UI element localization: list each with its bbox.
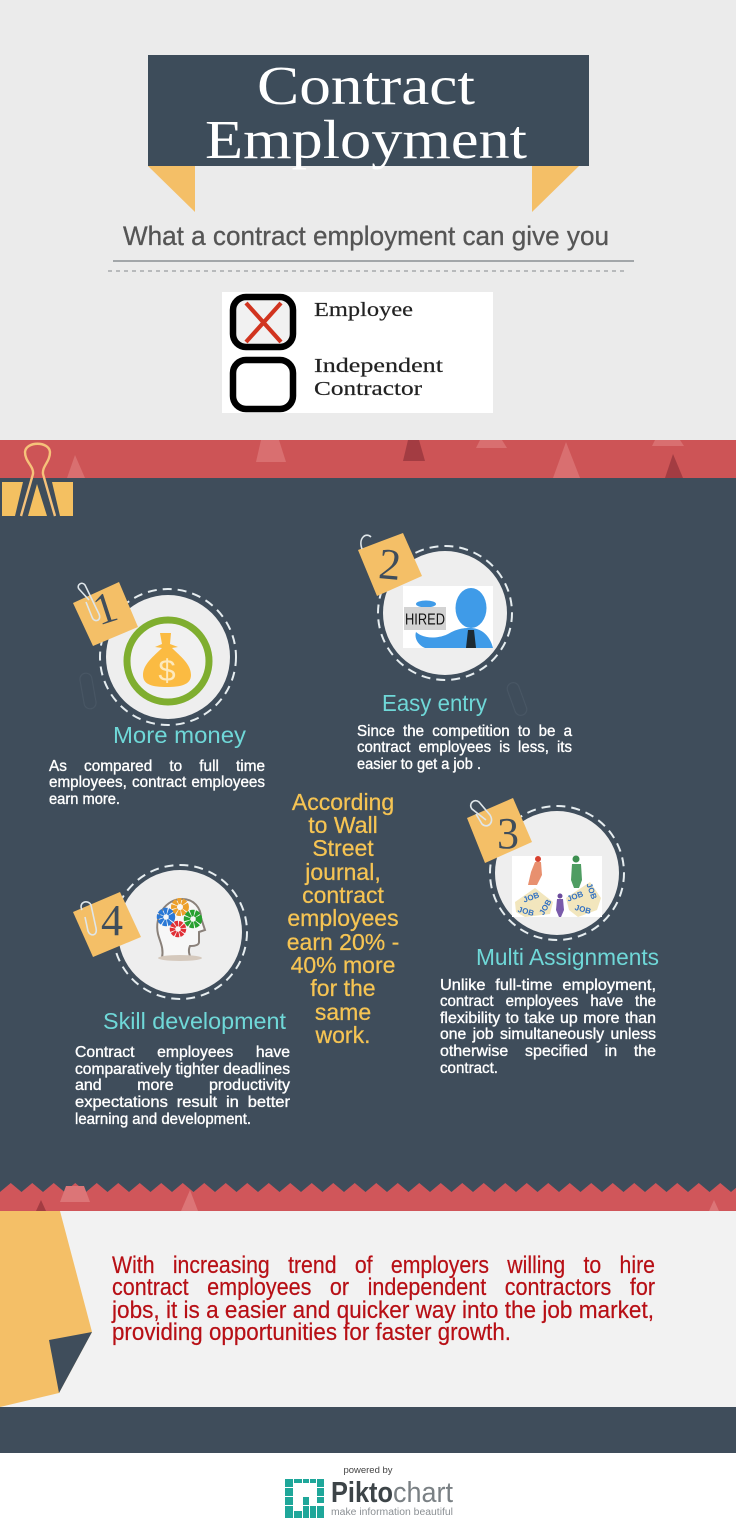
heading: Skill development: [103, 1008, 287, 1034]
icon: folded yellow corner: [0, 1211, 92, 1407]
callout: wall street journal: [287, 789, 399, 1048]
body text: [440, 977, 656, 1077]
dark footer strip: [0, 1407, 736, 1453]
conclusion text: providing opportunities for faster growth.: [112, 1319, 511, 1346]
heading: Easy entry: [382, 690, 487, 716]
conclusion text: With increasing trend of employers willing to hire: [112, 1252, 655, 1279]
icon: hired figure circle: HIRED: [405, 612, 445, 628]
body text: Since the competition to be a: [357, 723, 572, 740]
panel: conclusion: [0, 1211, 736, 1407]
body text: flexibility to take up more than: [440, 1010, 656, 1027]
title banner: [148, 55, 589, 212]
icon: job dice circle: [490, 806, 624, 940]
icon: money bag circle: [100, 589, 236, 725]
piktochart wordmark: Pikto: [331, 1477, 393, 1509]
conclusion text: [111, 1252, 655, 1346]
badge: number 1: [73, 582, 138, 646]
label: independent contractor: [314, 355, 444, 400]
subtitle: What a contract employment can give you: [123, 221, 609, 251]
icon: piktochart logo: [285, 1479, 324, 1518]
panel: item 2 easy entry: [357, 533, 572, 773]
callout: wall street journal: employees: [287, 905, 399, 931]
panel: item 3 multi assignments: [440, 798, 659, 1077]
body text: one job simultaneously unless: [440, 1026, 656, 1043]
label: employee: Employee: [314, 299, 413, 321]
icon: job dice circle: JOB: [584, 882, 599, 901]
icon: head with gears circle: [113, 865, 247, 999]
callout: wall street journal: work.: [315, 1022, 370, 1048]
callout: wall street journal: contract: [302, 882, 385, 908]
body text: expectations result in better: [75, 1094, 290, 1111]
callout: wall street journal: same: [315, 999, 371, 1025]
panel: zigzag red band: [0, 1183, 736, 1211]
body text: [75, 1044, 290, 1128]
title banner: Contract: [257, 55, 475, 116]
powered by: powered by: [343, 1465, 393, 1476]
body text: otherwise specified in the: [440, 1043, 656, 1060]
panel: item 1 more money: [49, 582, 265, 808]
badge: number 3: [467, 798, 532, 863]
heading: More money: [113, 722, 247, 748]
icon: job dice circle: JOB: [574, 903, 592, 916]
ghost paperclip: [79, 672, 97, 710]
panel: main dark section: [0, 478, 736, 1192]
panel: red band: [0, 440, 736, 478]
icon: checked box: [233, 297, 293, 347]
callout: wall street journal: 40% more: [291, 952, 395, 978]
conclusion text: contract employees or independent contractors for: [112, 1274, 655, 1301]
body text: contract employees have the: [440, 993, 656, 1010]
label: independent contractor: Contractor: [314, 378, 422, 400]
panel: header background: [0, 0, 736, 440]
callout: wall street journal: journal,: [304, 859, 381, 885]
callout: wall street journal: earn 20% -: [287, 929, 399, 955]
body text: Unlike full-time employment,: [440, 977, 656, 994]
icon: money bag circle: $: [158, 653, 176, 688]
body text: easier to get a job .: [357, 756, 481, 773]
body text: [357, 723, 572, 773]
tagline: make information beautiful: [331, 1507, 453, 1518]
icon: empty box: [233, 360, 293, 409]
panel: item 4 skill development: [73, 865, 290, 1128]
conclusion text: jobs, it is a easier and quicker way into the job market,: [111, 1297, 654, 1324]
icon: hired figure circle: [378, 546, 512, 680]
callout: wall street journal: According: [292, 789, 394, 815]
icon: job dice circle: JOB: [522, 890, 541, 905]
badge: number 2: [358, 533, 422, 596]
piktochart wordmark: chart: [393, 1477, 453, 1509]
icon: job dice circle: JOB: [517, 905, 535, 918]
ghost paperclip: [506, 681, 528, 717]
heading: Multi Assignments: [476, 944, 659, 970]
badge: number 3: 3: [497, 809, 519, 858]
piktochart wordmark: [331, 1477, 453, 1509]
body text: comparatively tighter deadlines: [75, 1061, 290, 1078]
body text: As compared to full time: [49, 758, 265, 775]
body text: learning and development.: [75, 1111, 251, 1128]
body text: contract.: [440, 1060, 498, 1077]
checkbox legend: [222, 292, 493, 413]
body text: earn more.: [49, 791, 120, 808]
panel: piktochart footer: [0, 1453, 736, 1528]
body text: and more productivity: [75, 1077, 290, 1094]
body text: [49, 758, 265, 808]
badge: number 2: 2: [377, 539, 403, 590]
callout: wall street journal: to Wall: [308, 812, 378, 838]
badge: number 4: 4: [101, 896, 123, 945]
icon: job dice circle: JOB: [566, 889, 585, 904]
badge: number 1: 1: [87, 582, 123, 635]
body text: contract employees is less, its: [357, 739, 572, 756]
label: independent contractor: Independent: [314, 355, 444, 377]
icon: binder clip: [2, 444, 73, 516]
callout: wall street journal: for the: [310, 975, 376, 1001]
body text: employees, contract employees: [49, 774, 265, 791]
icon: job dice circle: JOB: [537, 898, 554, 917]
title banner: Employment: [205, 109, 527, 170]
badge: number 4: [73, 892, 141, 957]
callout: wall street journal: Street: [312, 835, 374, 861]
body text: Contract employees have: [75, 1044, 290, 1061]
